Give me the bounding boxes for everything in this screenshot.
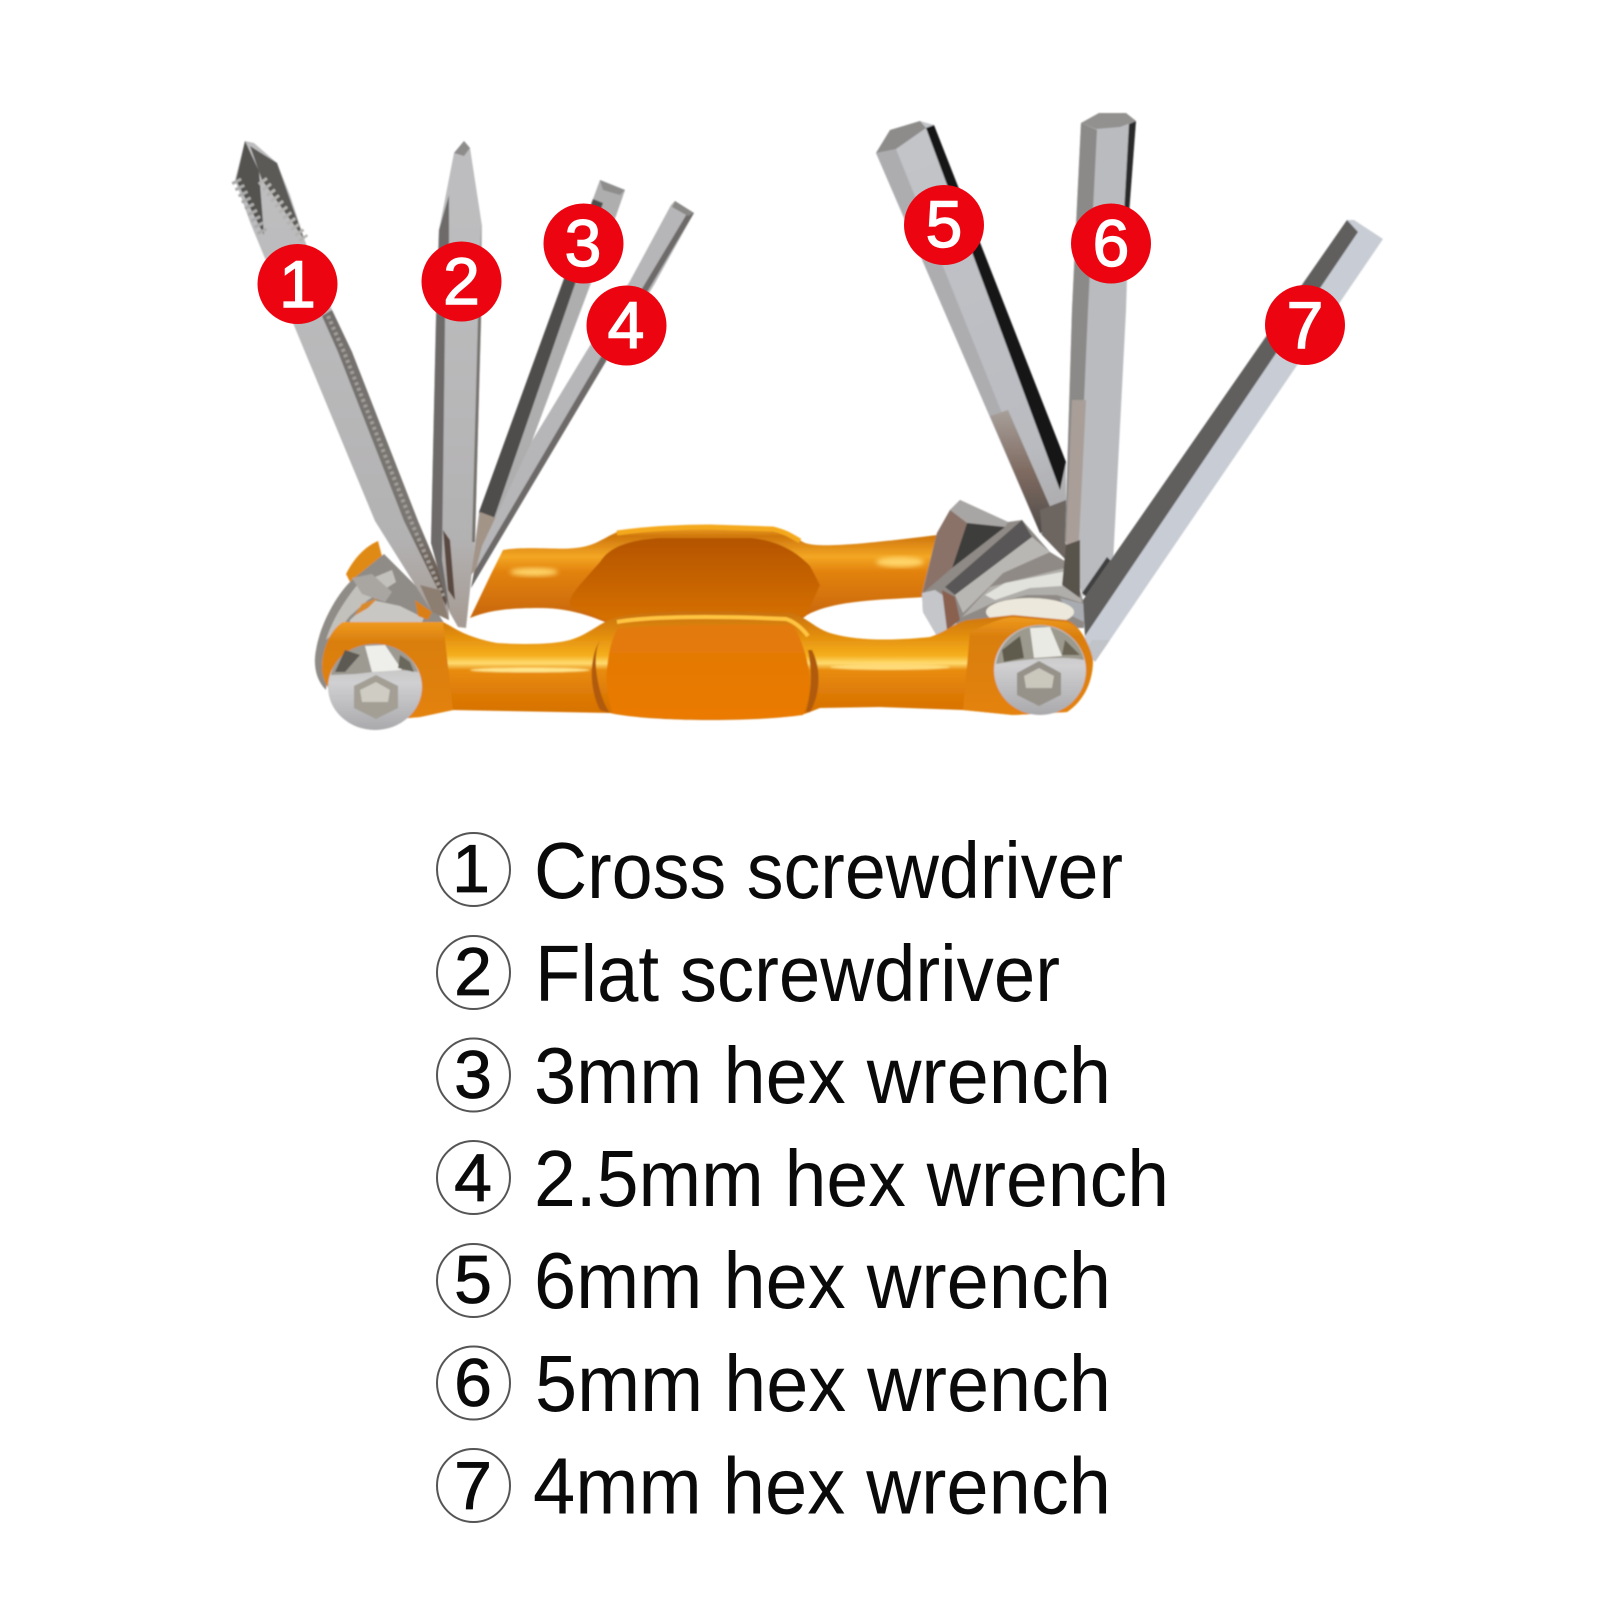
badge 4 <box>586 286 666 366</box>
legend item 3: 3 <box>454 1037 492 1113</box>
center grip block <box>606 625 810 719</box>
legend item 6: 6 <box>454 1345 492 1421</box>
badge 4: 4 <box>608 288 644 362</box>
badge 2 <box>422 242 502 322</box>
left end plate <box>322 622 453 722</box>
legend item 5: 6mm hex wrench <box>534 1236 1111 1325</box>
tool 7: 4mm hex wrench <box>1083 220 1383 662</box>
illustration: folding multi-tool <box>235 113 1383 730</box>
legend item 4: 4 <box>454 1140 492 1216</box>
badge 7: 7 <box>1287 288 1323 362</box>
legend item 7: 7 <box>454 1448 492 1524</box>
legend item 7: 4mm hex wrench <box>533 1442 1111 1530</box>
folded hex stubs <box>922 500 1084 636</box>
legend item 1: 1 <box>452 831 490 907</box>
badge 1: 1 <box>279 247 316 321</box>
badge 7 <box>1265 285 1345 365</box>
badge 3: 3 <box>565 206 601 280</box>
legend item 1: Cross screwdriver <box>534 826 1123 915</box>
tool 5: 6mm hex wrench <box>876 121 1066 560</box>
tool 4: 2.5mm hex wrench <box>471 201 694 588</box>
legend item 6: 5mm hex wrench <box>535 1339 1111 1428</box>
badge 5 <box>904 185 984 265</box>
legend item 2: 2 <box>454 934 492 1010</box>
back-left hardware <box>315 541 446 690</box>
legend item 3: 3mm hex wrench <box>534 1031 1111 1120</box>
badge 6: 6 <box>1093 206 1129 280</box>
badge 2: 2 <box>443 244 480 318</box>
legend item 4: 2.5mm hex wrench <box>534 1134 1169 1223</box>
tool 1: cross screwdriver <box>235 141 449 620</box>
legend list <box>437 826 1169 1530</box>
tool 2: flat screwdriver <box>431 141 482 628</box>
legend item 5: 5 <box>454 1242 492 1318</box>
front handle bar <box>322 611 1093 722</box>
tool 3: 3mm hex wrench <box>471 180 625 575</box>
badge 1 <box>258 244 338 324</box>
right end plate <box>963 617 1093 715</box>
back handle bar <box>470 526 937 628</box>
badge 3 <box>544 204 624 284</box>
badge 5: 5 <box>926 187 962 261</box>
tool 6: 5mm hex wrench <box>1062 113 1136 600</box>
right bolt <box>994 625 1086 715</box>
badge 6 <box>1071 204 1151 284</box>
left bolt <box>328 644 422 730</box>
legend item 2: Flat screwdriver <box>535 929 1060 1018</box>
